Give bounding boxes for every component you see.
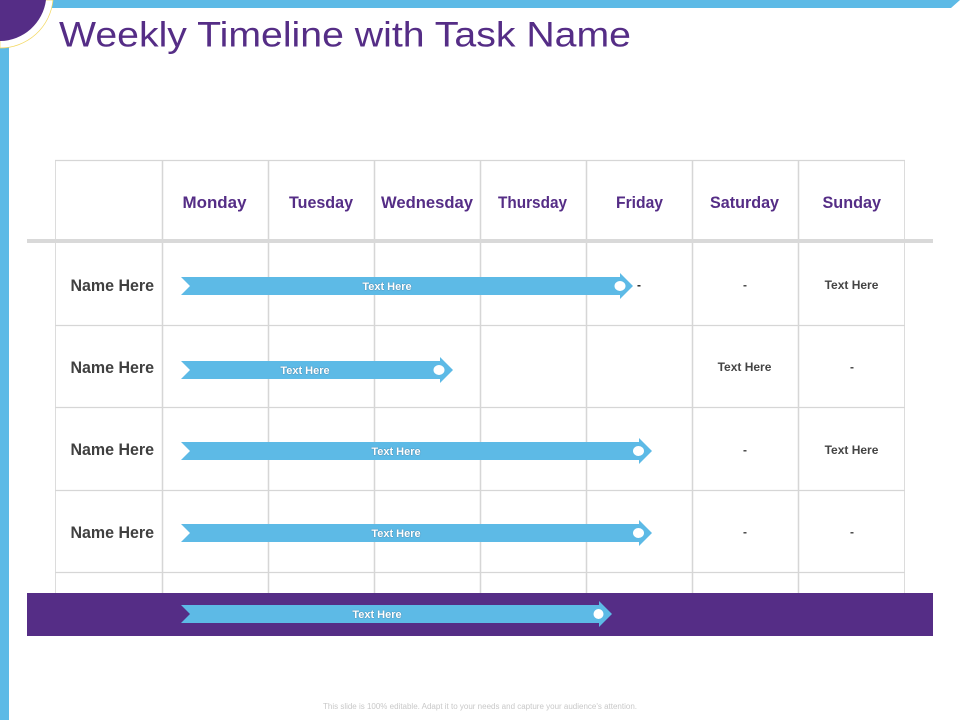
day headings xyxy=(182,194,882,212)
cell text entries: Text Here xyxy=(825,443,879,457)
header divider xyxy=(27,239,933,243)
cell text entries: - xyxy=(743,525,747,539)
arrow: row 2 xyxy=(181,357,453,383)
arrow: row 1 xyxy=(181,273,633,299)
title: Weekly Timeline with Task Name xyxy=(59,14,631,54)
arrow: row 3 xyxy=(181,438,652,464)
row name labels: Name Here xyxy=(70,359,154,377)
arrow: row 2: Text Here xyxy=(280,365,330,377)
corner decoration xyxy=(0,0,53,48)
day headings: Sunday xyxy=(822,194,882,212)
row name labels: Name Here xyxy=(70,441,154,459)
day headings: Thursday xyxy=(498,194,568,212)
left accent bar xyxy=(0,0,9,720)
cell text entries: Text Here xyxy=(718,360,772,374)
top accent bar xyxy=(0,0,960,8)
cell text entries: Text Here xyxy=(825,278,879,292)
row name labels: Name Here xyxy=(70,524,154,542)
day headings: Friday xyxy=(616,194,664,212)
row name labels xyxy=(70,277,154,542)
timeline table grid xyxy=(55,160,905,593)
row name labels: Name Here xyxy=(70,277,154,295)
day headings: Saturday xyxy=(710,194,780,212)
cell text entries xyxy=(637,278,879,539)
day headings: Monday xyxy=(182,194,247,212)
cell text entries: - xyxy=(850,525,854,539)
day headings: Tuesday xyxy=(289,194,354,212)
arrow: row 1: Text Here xyxy=(362,281,412,293)
day headings: Wednesday xyxy=(381,194,474,212)
arrow: row 5 xyxy=(181,601,612,627)
footer note: This slide is 100% editable. Adapt it to your needs and capture your audience's attention. xyxy=(323,702,637,711)
cell text entries: - xyxy=(743,278,747,292)
cell text entries: - xyxy=(743,443,747,457)
cell text entries: - xyxy=(637,278,641,292)
cell text entries: - xyxy=(850,360,854,374)
arrow: row 4: Text Here xyxy=(371,528,421,540)
arrow: row 3: Text Here xyxy=(371,446,421,458)
arrow: row 5: Text Here xyxy=(352,609,402,621)
arrow: row 4 xyxy=(181,520,652,546)
purple footer band xyxy=(27,593,933,636)
